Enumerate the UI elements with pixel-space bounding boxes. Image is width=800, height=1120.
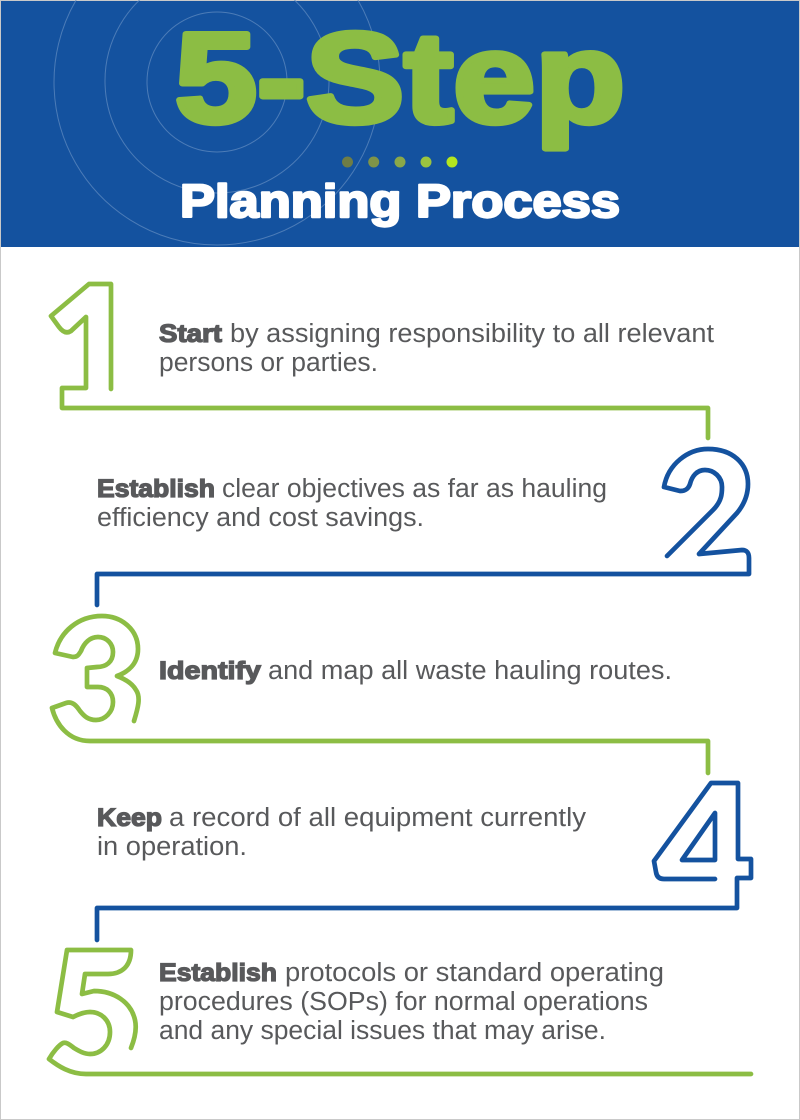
step 2 text: Establish — [97, 475, 215, 503]
numeral 2 with connector — [97, 449, 749, 605]
numeral 1 with connector — [51, 284, 708, 438]
step 1 text — [159, 320, 714, 377]
step 2 text — [97, 475, 607, 532]
step 4 — [97, 783, 751, 940]
step 1 — [51, 284, 714, 438]
subtitle: Planning Process: Planning Process — [180, 175, 620, 227]
step 4 text — [97, 804, 586, 861]
step 4 text: a record of all equipment currently — [169, 804, 586, 832]
step 4 text: Keep — [97, 804, 162, 832]
step 1 text: Start — [159, 320, 223, 348]
step 5 text: Establish — [159, 959, 277, 987]
progress dots — [342, 156, 458, 168]
step 5 text: and any special issues that may arise. — [159, 1017, 606, 1045]
step 5 text — [159, 959, 664, 1045]
numeral 3 with connector — [52, 616, 708, 773]
step 5 — [49, 950, 751, 1074]
step 3 text: Identify — [159, 657, 261, 685]
title: 5-Step: 5-Step — [175, 7, 625, 150]
step 5 text: protocols or standard operating — [285, 959, 664, 987]
step 3 — [52, 616, 708, 773]
step 1 text: persons or parties. — [159, 349, 378, 377]
numeral 5 with connector — [49, 950, 751, 1074]
step 2 — [97, 449, 749, 605]
step 3 text: and map all waste hauling routes. — [268, 657, 672, 685]
header banner — [1, 0, 799, 247]
step 4 text: in operation. — [97, 833, 247, 861]
concentric circles — [54, 0, 380, 245]
step 5 text: procedures (SOPs) for normal operations — [159, 988, 648, 1016]
step 2 text: clear objectives as far as hauling — [222, 475, 607, 503]
step 2 text: efficiency and cost savings. — [97, 504, 424, 532]
numeral 4 inner triangle — [682, 813, 715, 860]
numeral 4 with connector — [97, 783, 751, 940]
step 1 text: by assigning responsibility to all relevant — [230, 320, 714, 348]
